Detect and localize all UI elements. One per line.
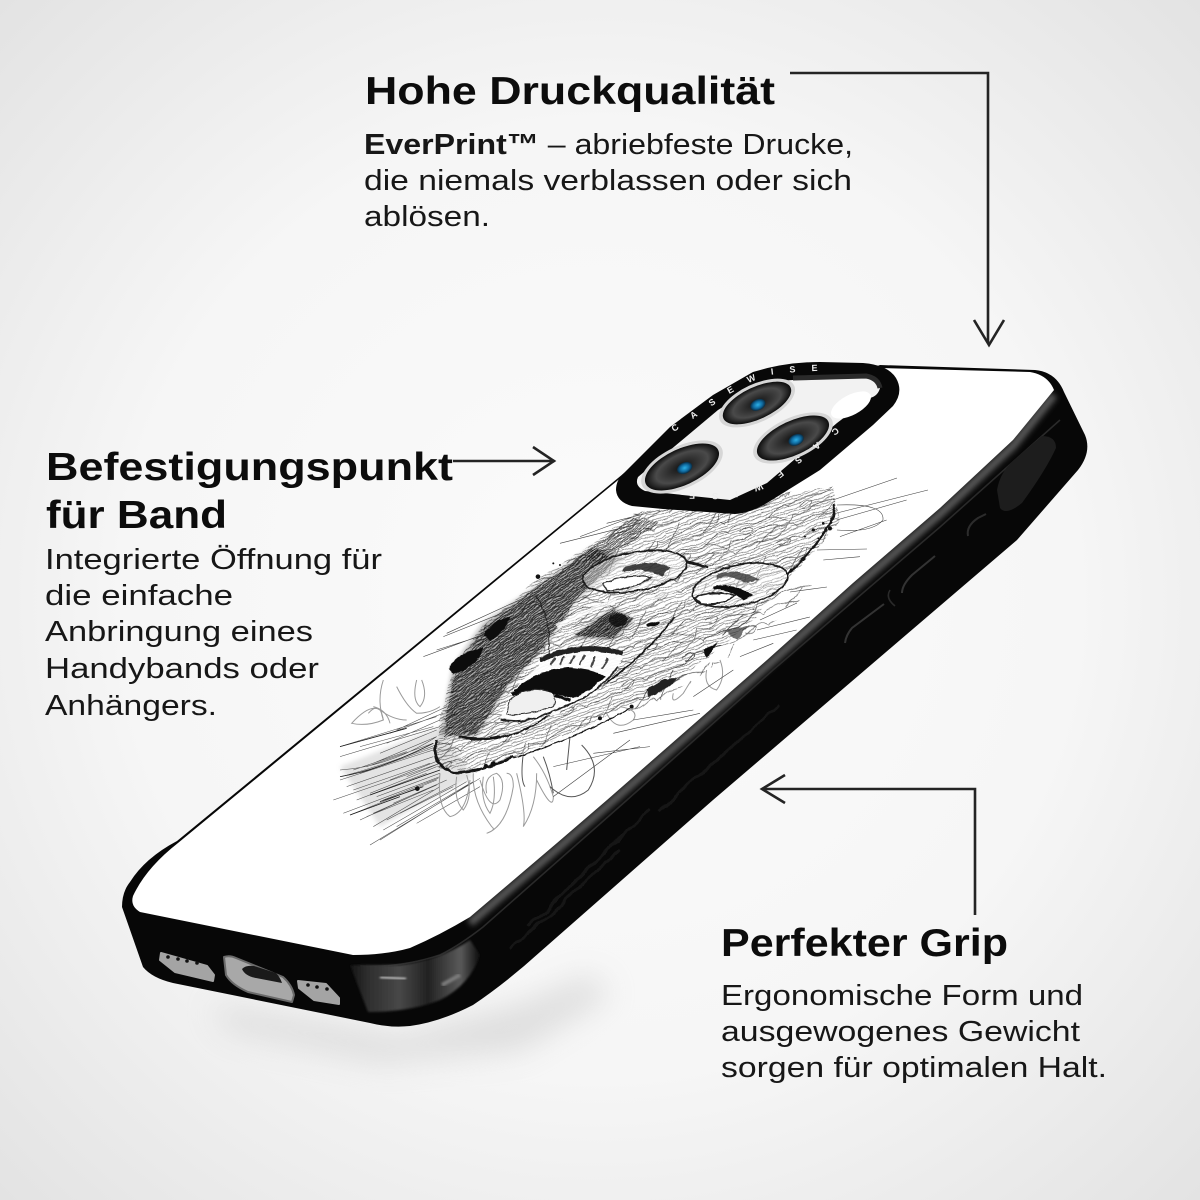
body text: Integrierte Öffnung für xyxy=(45,544,382,576)
body text: ausgewogenes Gewicht xyxy=(721,1016,1080,1048)
heading: Perfekter Grip xyxy=(721,922,1008,965)
heading: Hohe Druckqualität xyxy=(365,70,775,113)
body text: sorgen für optimalen Halt. xyxy=(721,1052,1107,1084)
jaw and chin contours xyxy=(435,503,834,773)
body text: EverPrint™ – abriebfeste Drucke, xyxy=(364,129,853,161)
scribble portrait xyxy=(333,478,928,845)
soft inner edge reflection xyxy=(470,395,1054,923)
camera brand text: CASEWISE xyxy=(672,364,818,431)
charging port xyxy=(224,956,294,1002)
callout: print quality xyxy=(364,70,853,233)
arrow: to case back xyxy=(790,73,1004,345)
body text: ablösen. xyxy=(364,201,490,233)
body text: die einfache xyxy=(45,580,233,612)
lens left xyxy=(633,429,731,505)
tone layer xyxy=(340,547,633,827)
printed screen xyxy=(132,368,1054,955)
loose gray loops xyxy=(352,660,723,833)
grip texture xyxy=(510,705,780,950)
phone shadow xyxy=(210,975,610,1062)
nose xyxy=(557,587,680,627)
heading xyxy=(46,446,453,537)
ears and dark accents xyxy=(448,617,750,697)
side band line xyxy=(360,420,1060,966)
glasses xyxy=(582,549,789,608)
body text: Handybands oder xyxy=(45,653,319,685)
body text xyxy=(364,129,853,233)
body text: Anbringung eines xyxy=(45,616,313,648)
lens top xyxy=(712,368,802,438)
corner gloss xyxy=(350,940,480,1012)
heading: für Band xyxy=(46,494,227,537)
camera rim xyxy=(616,362,899,514)
body text: Ergonomische Form und xyxy=(721,980,1083,1012)
hair lines xyxy=(333,707,480,845)
lens right xyxy=(746,402,840,474)
speaker grill right xyxy=(298,981,339,1004)
speaker grill left xyxy=(160,953,214,981)
body text xyxy=(721,980,1107,1084)
side rear reflection xyxy=(997,436,1056,511)
case body xyxy=(122,365,1087,1027)
phone case illustration xyxy=(122,362,1088,1027)
body text xyxy=(45,544,382,722)
ink dots xyxy=(415,522,832,791)
mouth xyxy=(500,649,623,721)
camera bump xyxy=(616,362,900,514)
side buttons xyxy=(845,514,986,643)
arrow: to strap point xyxy=(453,447,554,475)
camera brand text xyxy=(672,364,838,500)
callout: strap attachment xyxy=(45,446,453,722)
callout: perfect grip xyxy=(721,922,1107,1084)
body text: die niemals verblassen oder sich xyxy=(364,165,852,197)
head texture xyxy=(437,487,840,773)
far loose lines xyxy=(423,478,928,797)
camera brand text: CASEWISE xyxy=(690,428,838,500)
body text: Anhängers. xyxy=(45,690,217,722)
arrow: to case side xyxy=(762,775,975,915)
heading: Befestigungspunkt xyxy=(46,446,453,489)
camera glass xyxy=(637,375,880,500)
